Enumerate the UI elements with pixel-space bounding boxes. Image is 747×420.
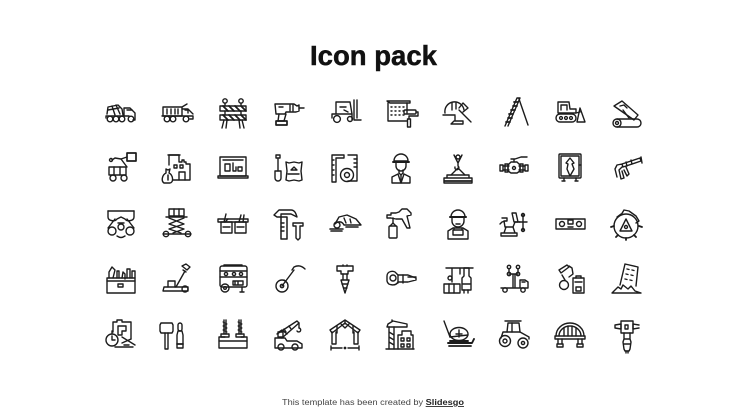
icon: circular saw — [611, 210, 642, 240]
icon: bulldozer — [556, 102, 585, 122]
icon: construction worker — [448, 210, 468, 239]
icon: power generator — [220, 265, 247, 292]
icon: road paint tools — [444, 268, 473, 293]
icon: caulking gun — [615, 157, 642, 179]
icon: toolbox — [107, 267, 135, 293]
icon: road barrier — [220, 99, 246, 128]
icon: factory with money bag — [162, 155, 190, 183]
icon: cordless drill — [275, 104, 304, 125]
icon: safety goggles and respirator — [108, 211, 134, 238]
icon: demolition drill bit — [337, 265, 353, 293]
icon: scissor lift — [163, 209, 191, 237]
icon: tool belt — [218, 214, 248, 233]
icon: hard hat and hammer — [443, 102, 471, 124]
icon: road roller — [500, 321, 529, 348]
icon: gable structure with span — [330, 320, 360, 350]
icon: paint spray gun — [387, 209, 411, 238]
icon: foundation piles — [219, 320, 247, 348]
icon: ladder — [505, 98, 528, 126]
title: Icon pack — [310, 40, 438, 71]
icon: arch bridge — [555, 323, 585, 347]
icon: hammer and nail — [274, 210, 303, 240]
icon: spirit level — [556, 219, 585, 229]
icon: impact wrench — [387, 271, 416, 285]
icon: dump truck — [162, 104, 193, 122]
icon: forklift — [332, 100, 361, 122]
icon: shovel and cement bag — [275, 155, 302, 181]
icon: cable and battery — [559, 265, 584, 293]
icon: concrete mixer truck — [106, 105, 135, 122]
icon: collapsed building — [612, 264, 641, 293]
icon: plan, stopwatch and compass — [106, 320, 135, 347]
icon: measuring wheel — [276, 266, 305, 292]
icon: plate compactor — [444, 321, 474, 346]
icon: floor sander machine — [163, 264, 190, 292]
footer credit: This template has been created by Slidesgo — [282, 397, 464, 407]
icon: mallet and chisel — [160, 323, 183, 349]
icon: bench vise — [500, 213, 527, 236]
icon: tower crane and building — [386, 320, 414, 349]
icon: aerial lift — [109, 153, 136, 181]
icon: boom lift truck — [501, 265, 528, 292]
icon: crane hook lifting beam — [444, 155, 472, 183]
icon: jackhammer — [615, 321, 639, 353]
icon: pipe valve — [500, 157, 528, 173]
icon: engineer portrait — [392, 154, 410, 183]
icon: angle grinder — [330, 215, 361, 231]
icon: wallpaper and roller — [387, 101, 418, 127]
icon: log conveyor saw — [613, 101, 641, 127]
icon: mobile crane — [275, 321, 302, 350]
icon: laptop with blueprint — [218, 157, 248, 178]
icon: measuring square and tape — [332, 155, 357, 182]
icon: electric panel — [559, 154, 581, 181]
